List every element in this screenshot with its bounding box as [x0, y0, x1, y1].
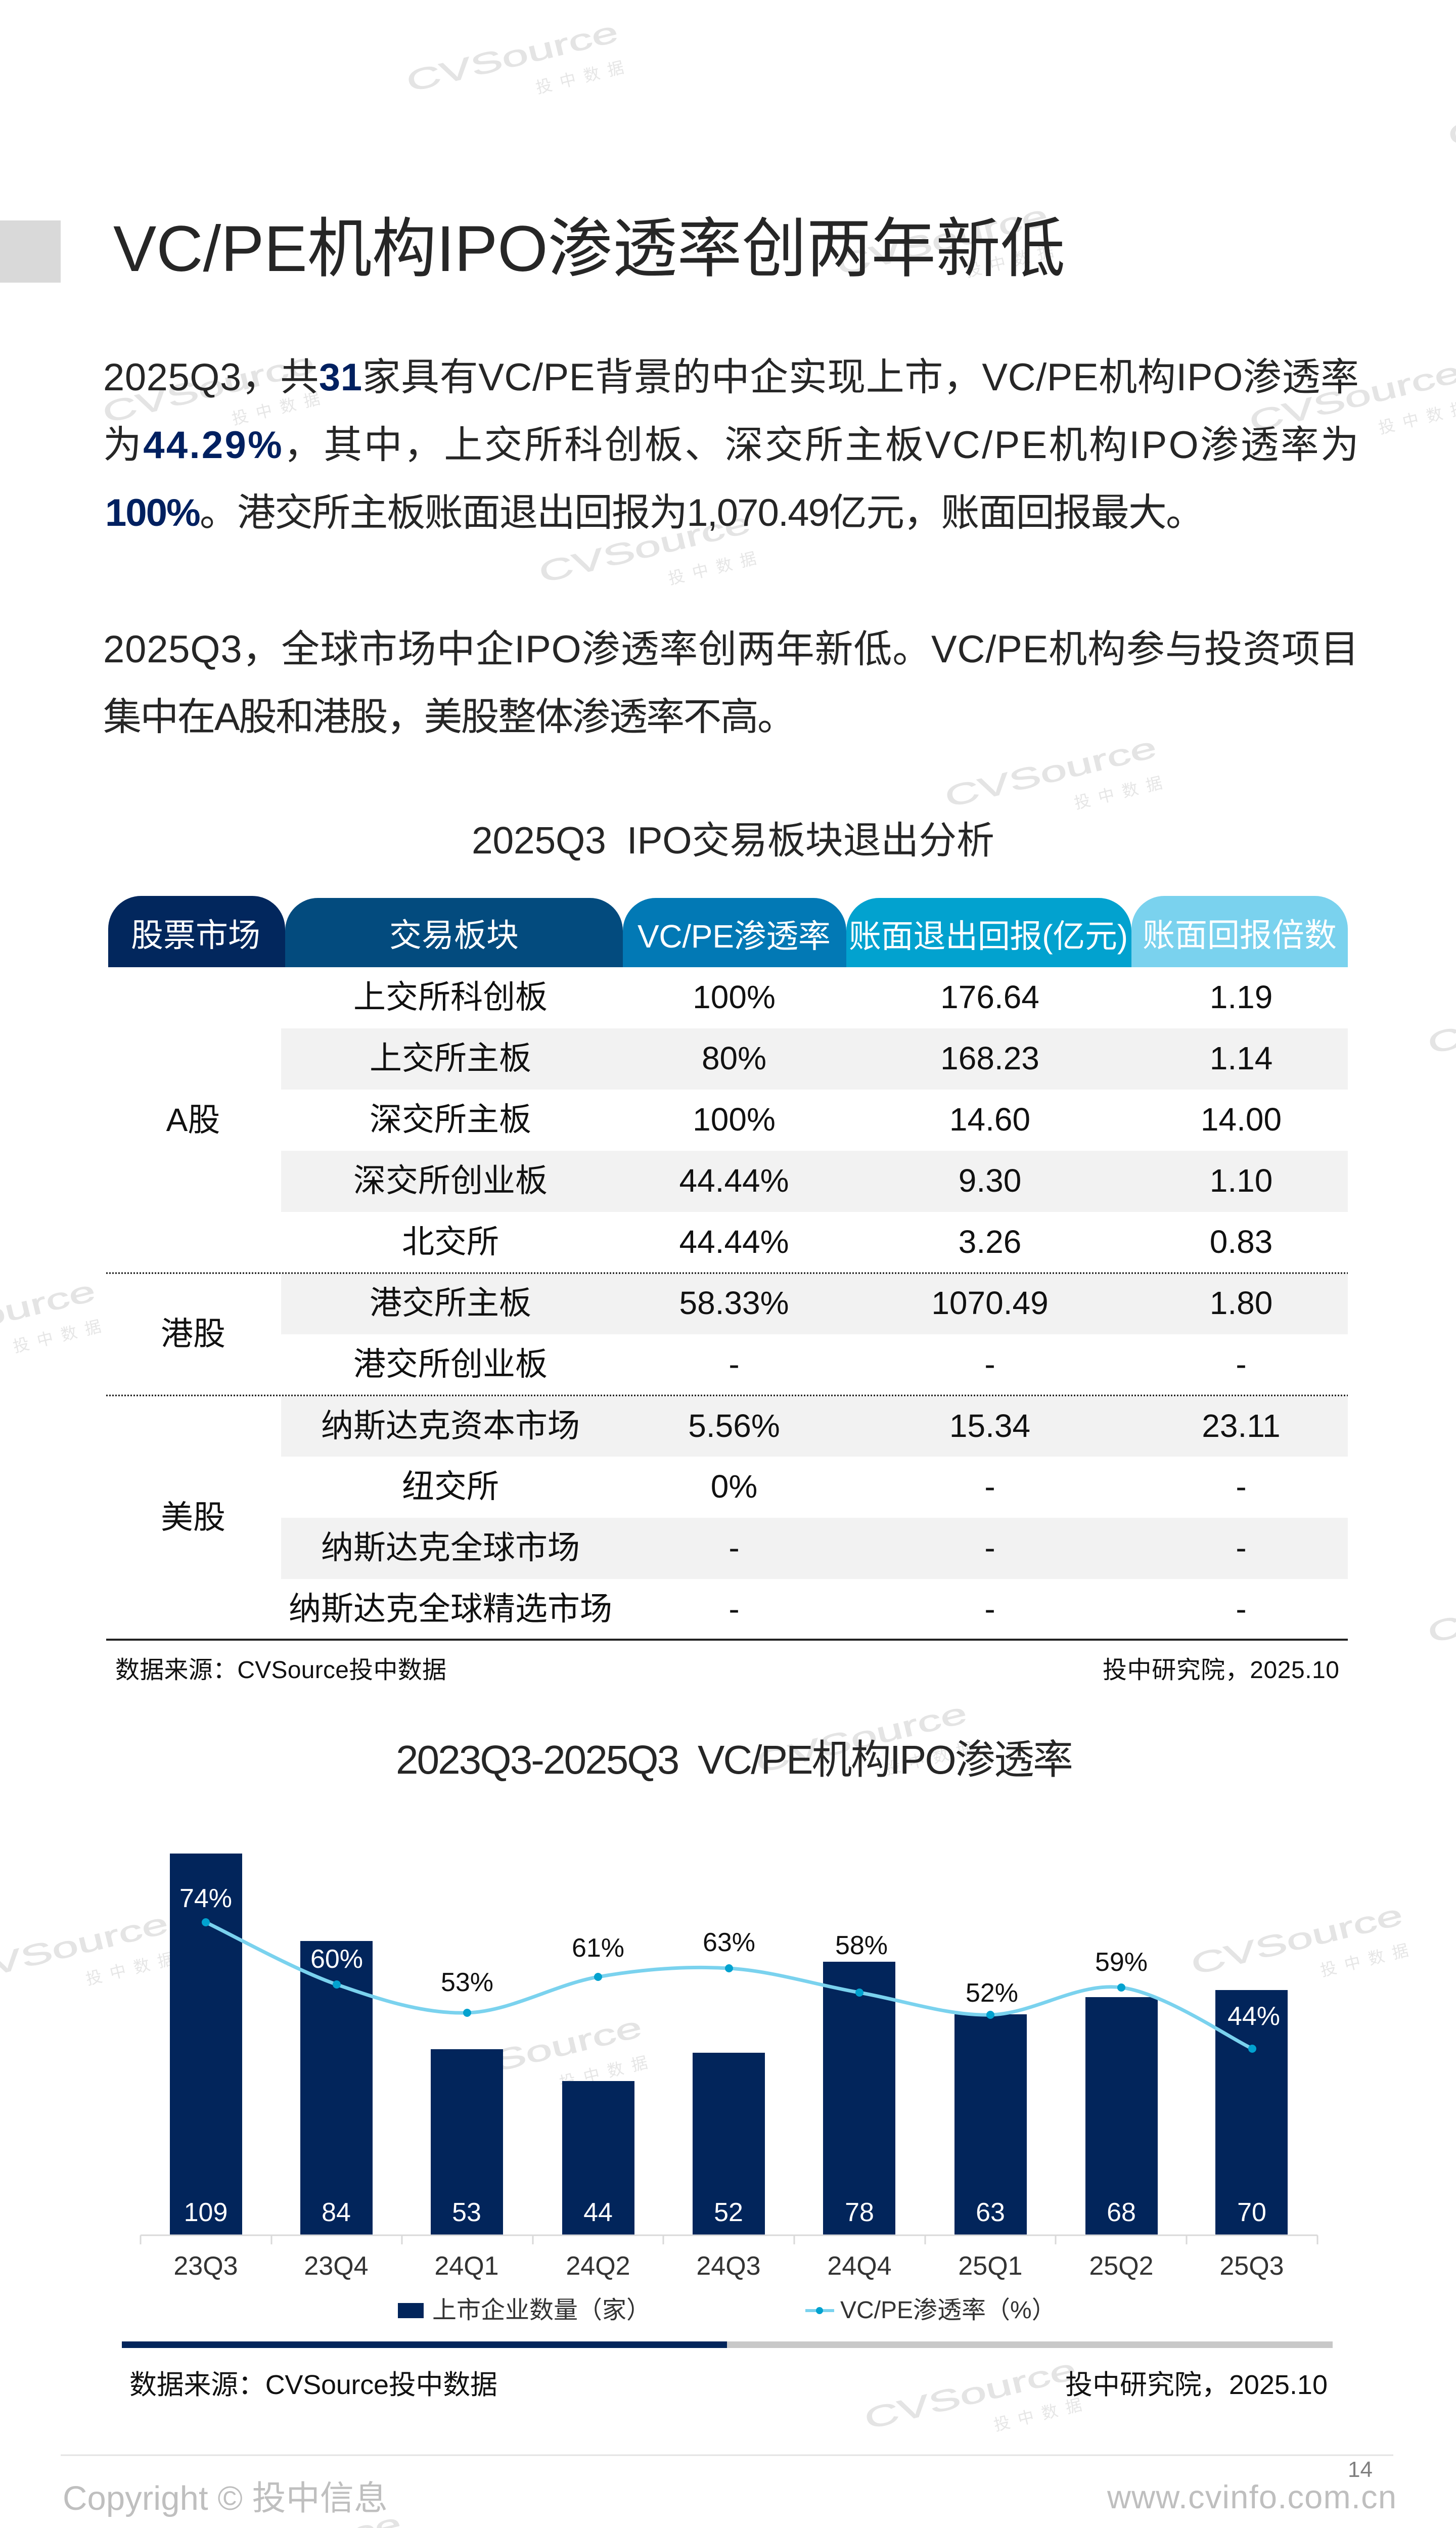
- line markers: [202, 1918, 1256, 2053]
- table rows: 纳斯达克资本市场: [321, 1408, 580, 1444]
- market labels: [161, 1102, 225, 1536]
- table credit: 投中研究院，2025.10: [1103, 1657, 1339, 1684]
- axis: [141, 2235, 1317, 2244]
- table rows: -: [1236, 1468, 1247, 1505]
- table rows: 14.00: [1201, 1101, 1282, 1138]
- penetration line: [206, 1922, 1252, 2049]
- table rows: 港交所主板: [370, 1285, 531, 1321]
- watermarks: CVSource 投中数据: 投中数据: [666, 549, 758, 588]
- table header: [108, 896, 1348, 967]
- percent labels: 63%: [703, 1928, 755, 1957]
- text block: second paragraph: [103, 628, 1359, 739]
- table header: 账面退出回报(亿元): [849, 918, 1128, 955]
- watermarks: CVSource 投中数据: 投中数据: [11, 1317, 103, 1356]
- watermarks: CVSource 投中数据: 投中数据: [1072, 774, 1164, 812]
- table rows: 0%: [711, 1468, 757, 1505]
- table rows: 23.11: [1202, 1408, 1281, 1444]
- legend: 上市企业数量（家）: [432, 2297, 651, 2324]
- table rows: 15.34: [949, 1408, 1030, 1444]
- text block: intro paragraph: 为44.29%，其中，上交所科创板、深交所主板VC/PE机构IPO渗透率为: [103, 424, 1359, 467]
- table rows: -: [729, 1591, 740, 1627]
- table rows: 纽交所: [402, 1468, 499, 1505]
- table rows: -: [729, 1346, 740, 1382]
- table rows: 5.56%: [688, 1408, 780, 1444]
- watermarks: CVSource 投中数据: 投中数据: [534, 58, 626, 97]
- legend: VC/PE渗透率（%）: [840, 2297, 1056, 2324]
- percent labels: 74%: [179, 1884, 232, 1913]
- watermarks: CVSource 投中数据: CVSource: [752, 1696, 970, 1780]
- title marker block: [0, 220, 61, 283]
- table header: 账面回报倍数: [1143, 917, 1337, 954]
- axis labels: 25Q1: [958, 2251, 1023, 2281]
- watermarks: CVSource 投中数据: 投中数据: [230, 389, 322, 428]
- axis labels: 25Q3: [1219, 2251, 1284, 2281]
- table rows: 176.64: [940, 979, 1039, 1015]
- axis labels: [173, 2251, 1284, 2281]
- footer copyright: Copyright © 投中信息: [63, 2479, 388, 2517]
- watermarks: CVSource 投中数据: 投中数据: [964, 242, 1056, 281]
- bar value labels: 70: [1237, 2198, 1266, 2227]
- bar value labels: 44: [583, 2198, 613, 2227]
- market labels: 港股: [161, 1316, 225, 1352]
- table header: 交易板块: [389, 917, 519, 954]
- bar value labels: 109: [184, 2198, 228, 2227]
- axis labels: 23Q3: [173, 2251, 238, 2281]
- bar value labels: 53: [452, 2198, 481, 2227]
- table rows: -: [1236, 1346, 1247, 1382]
- market labels: A股: [166, 1102, 220, 1138]
- axis labels: 24Q1: [434, 2251, 499, 2281]
- bar value labels: 52: [714, 2198, 743, 2227]
- table rows: 9.30: [959, 1162, 1021, 1199]
- bar value labels: 84: [322, 2198, 351, 2227]
- axis labels: 25Q2: [1089, 2251, 1154, 2281]
- market labels: 美股: [161, 1499, 225, 1536]
- watermarks: CVSource 投中数据: 投中数据: [558, 2053, 650, 2092]
- table rows: 上交所主板: [370, 1040, 531, 1076]
- axis labels: 24Q4: [827, 2251, 892, 2281]
- combo chart: listed companies and VC/PE penetration: [141, 1854, 1317, 2281]
- watermarks: CVSource 投中数据: CVSource: [100, 346, 317, 430]
- table rows: 纳斯达克全球精选市场: [289, 1591, 612, 1627]
- percent labels: 60%: [310, 1945, 363, 1974]
- table rows: 44.44%: [679, 1162, 789, 1199]
- table rows: 1.10: [1210, 1162, 1272, 1199]
- chart credit: 投中研究院，2025.10: [1065, 2370, 1328, 2400]
- bar value labels: 78: [845, 2198, 874, 2227]
- watermarks: CVSource 投中数据: 投中数据: [883, 1739, 975, 1778]
- progress bar: [122, 2341, 1333, 2348]
- table rows: -: [984, 1346, 995, 1382]
- bar value labels: 63: [976, 2198, 1005, 2227]
- percent labels: 61%: [572, 1933, 624, 1963]
- table header: VC/PE渗透率: [638, 918, 831, 955]
- footer rule: [61, 2454, 1393, 2456]
- watermarks: CVSource 投中数据: CVSource: [861, 2353, 1079, 2436]
- percent labels: 44%: [1227, 2002, 1280, 2031]
- text block: intro paragraph: 100%。港交所主板账面退出回报为1,070.49亿元，账面回报最大。: [105, 491, 1204, 534]
- table rows: 1070.49: [931, 1285, 1049, 1321]
- table rows: 0.83: [1210, 1224, 1272, 1260]
- table rows: 港交所创业板: [353, 1346, 548, 1382]
- watermarks: CVSource 投中数据: CVSource: [1188, 1898, 1406, 1981]
- table rows: 100%: [693, 1101, 776, 1138]
- watermarks: CVSource 投中数据: CVSource: [833, 199, 1051, 282]
- table rows: 深交所主板: [370, 1101, 531, 1138]
- watermarks: CVSource 投中数据: CVSource: [403, 15, 621, 99]
- table: IPO exit analysis: [106, 896, 1348, 1640]
- text block: intro paragraph: 2025Q3，共31家具有VC/PE背景的中企实现上市，VC/PE机构IPO渗透率: [103, 356, 1359, 399]
- text block: second paragraph: 2025Q3，全球市场中企IPO渗透率创两年新低。VC/PE机构参与投资项目: [103, 628, 1359, 671]
- percent labels: 53%: [441, 1968, 493, 1997]
- table rows: 上交所科创板: [353, 979, 548, 1015]
- table rows: 168.23: [940, 1040, 1039, 1076]
- text block: intro paragraph: [103, 356, 1359, 534]
- table rows: -: [984, 1591, 995, 1627]
- table rows: [289, 979, 1282, 1627]
- table rows: 1.19: [1210, 979, 1272, 1015]
- watermarks: CVSource 投中数据: 投中数据: [992, 2396, 1084, 2434]
- table rows: -: [1236, 1529, 1247, 1566]
- chart source: 数据来源：CVSource投中数据: [129, 2370, 497, 2400]
- row stripes: [281, 1028, 1348, 1579]
- table rows: 44.44%: [679, 1224, 789, 1260]
- page number: 14: [1348, 2457, 1373, 2482]
- percent labels: 59%: [1095, 1948, 1148, 1977]
- percent labels: [179, 1884, 1280, 2031]
- table rows: 58.33%: [679, 1285, 789, 1321]
- table rows: 纳斯达克全球市场: [321, 1529, 580, 1566]
- table rows: 80%: [702, 1040, 766, 1076]
- table rows: -: [1236, 1591, 1247, 1627]
- axis labels: 24Q2: [566, 2251, 630, 2281]
- watermarks: CVSource 投中数据: CVSource: [1246, 355, 1456, 439]
- table source: 数据来源：CVSource投中数据: [115, 1657, 446, 1684]
- percent labels: 58%: [835, 1931, 888, 1960]
- legend: [398, 2297, 1056, 2324]
- watermarks: CVSource 投中数据: 投中数据: [1318, 1941, 1410, 1980]
- watermarks: CVSource 投中数据: CVSource: [536, 506, 754, 590]
- table rows: 14.60: [949, 1101, 1030, 1138]
- axis labels: 24Q3: [696, 2251, 761, 2281]
- table title: 2025Q3 IPO交易板块退出分析: [472, 819, 994, 862]
- bar value labels: [184, 2198, 1266, 2227]
- table rows: 深交所创业板: [353, 1162, 548, 1199]
- footer url: www.cvinfo.com.cn: [1107, 2478, 1396, 2515]
- percent labels: 52%: [966, 1978, 1018, 2008]
- axis labels: 23Q4: [304, 2251, 369, 2281]
- watermarks: CVSource 投中数据: CVSource: [942, 731, 1160, 814]
- watermarks: CVSource 投中数据: CVSource: [427, 2010, 645, 2094]
- table rows: -: [984, 1468, 995, 1505]
- bars: [170, 1854, 1288, 2235]
- watermarks: CVSource 投中数据: 投中数据: [84, 1950, 176, 1989]
- table rows: 1.14: [1210, 1040, 1272, 1076]
- table rows: 1.80: [1210, 1285, 1272, 1321]
- table rows: -: [984, 1529, 995, 1566]
- title: VC/PE机构IPO渗透率创两年新低: [113, 213, 1065, 285]
- table rows: 3.26: [959, 1224, 1021, 1260]
- table rows: 北交所: [402, 1224, 499, 1260]
- bar value labels: 68: [1107, 2198, 1136, 2227]
- table rows: -: [729, 1529, 740, 1566]
- text block: second paragraph: 集中在A股和港股，美股整体渗透率不高。: [103, 696, 796, 739]
- table rows: 100%: [693, 979, 776, 1015]
- chart title: 2023Q3-2025Q3 VC/PE机构IPO渗透率: [396, 1737, 1073, 1782]
- table header: 股票市场: [131, 917, 260, 954]
